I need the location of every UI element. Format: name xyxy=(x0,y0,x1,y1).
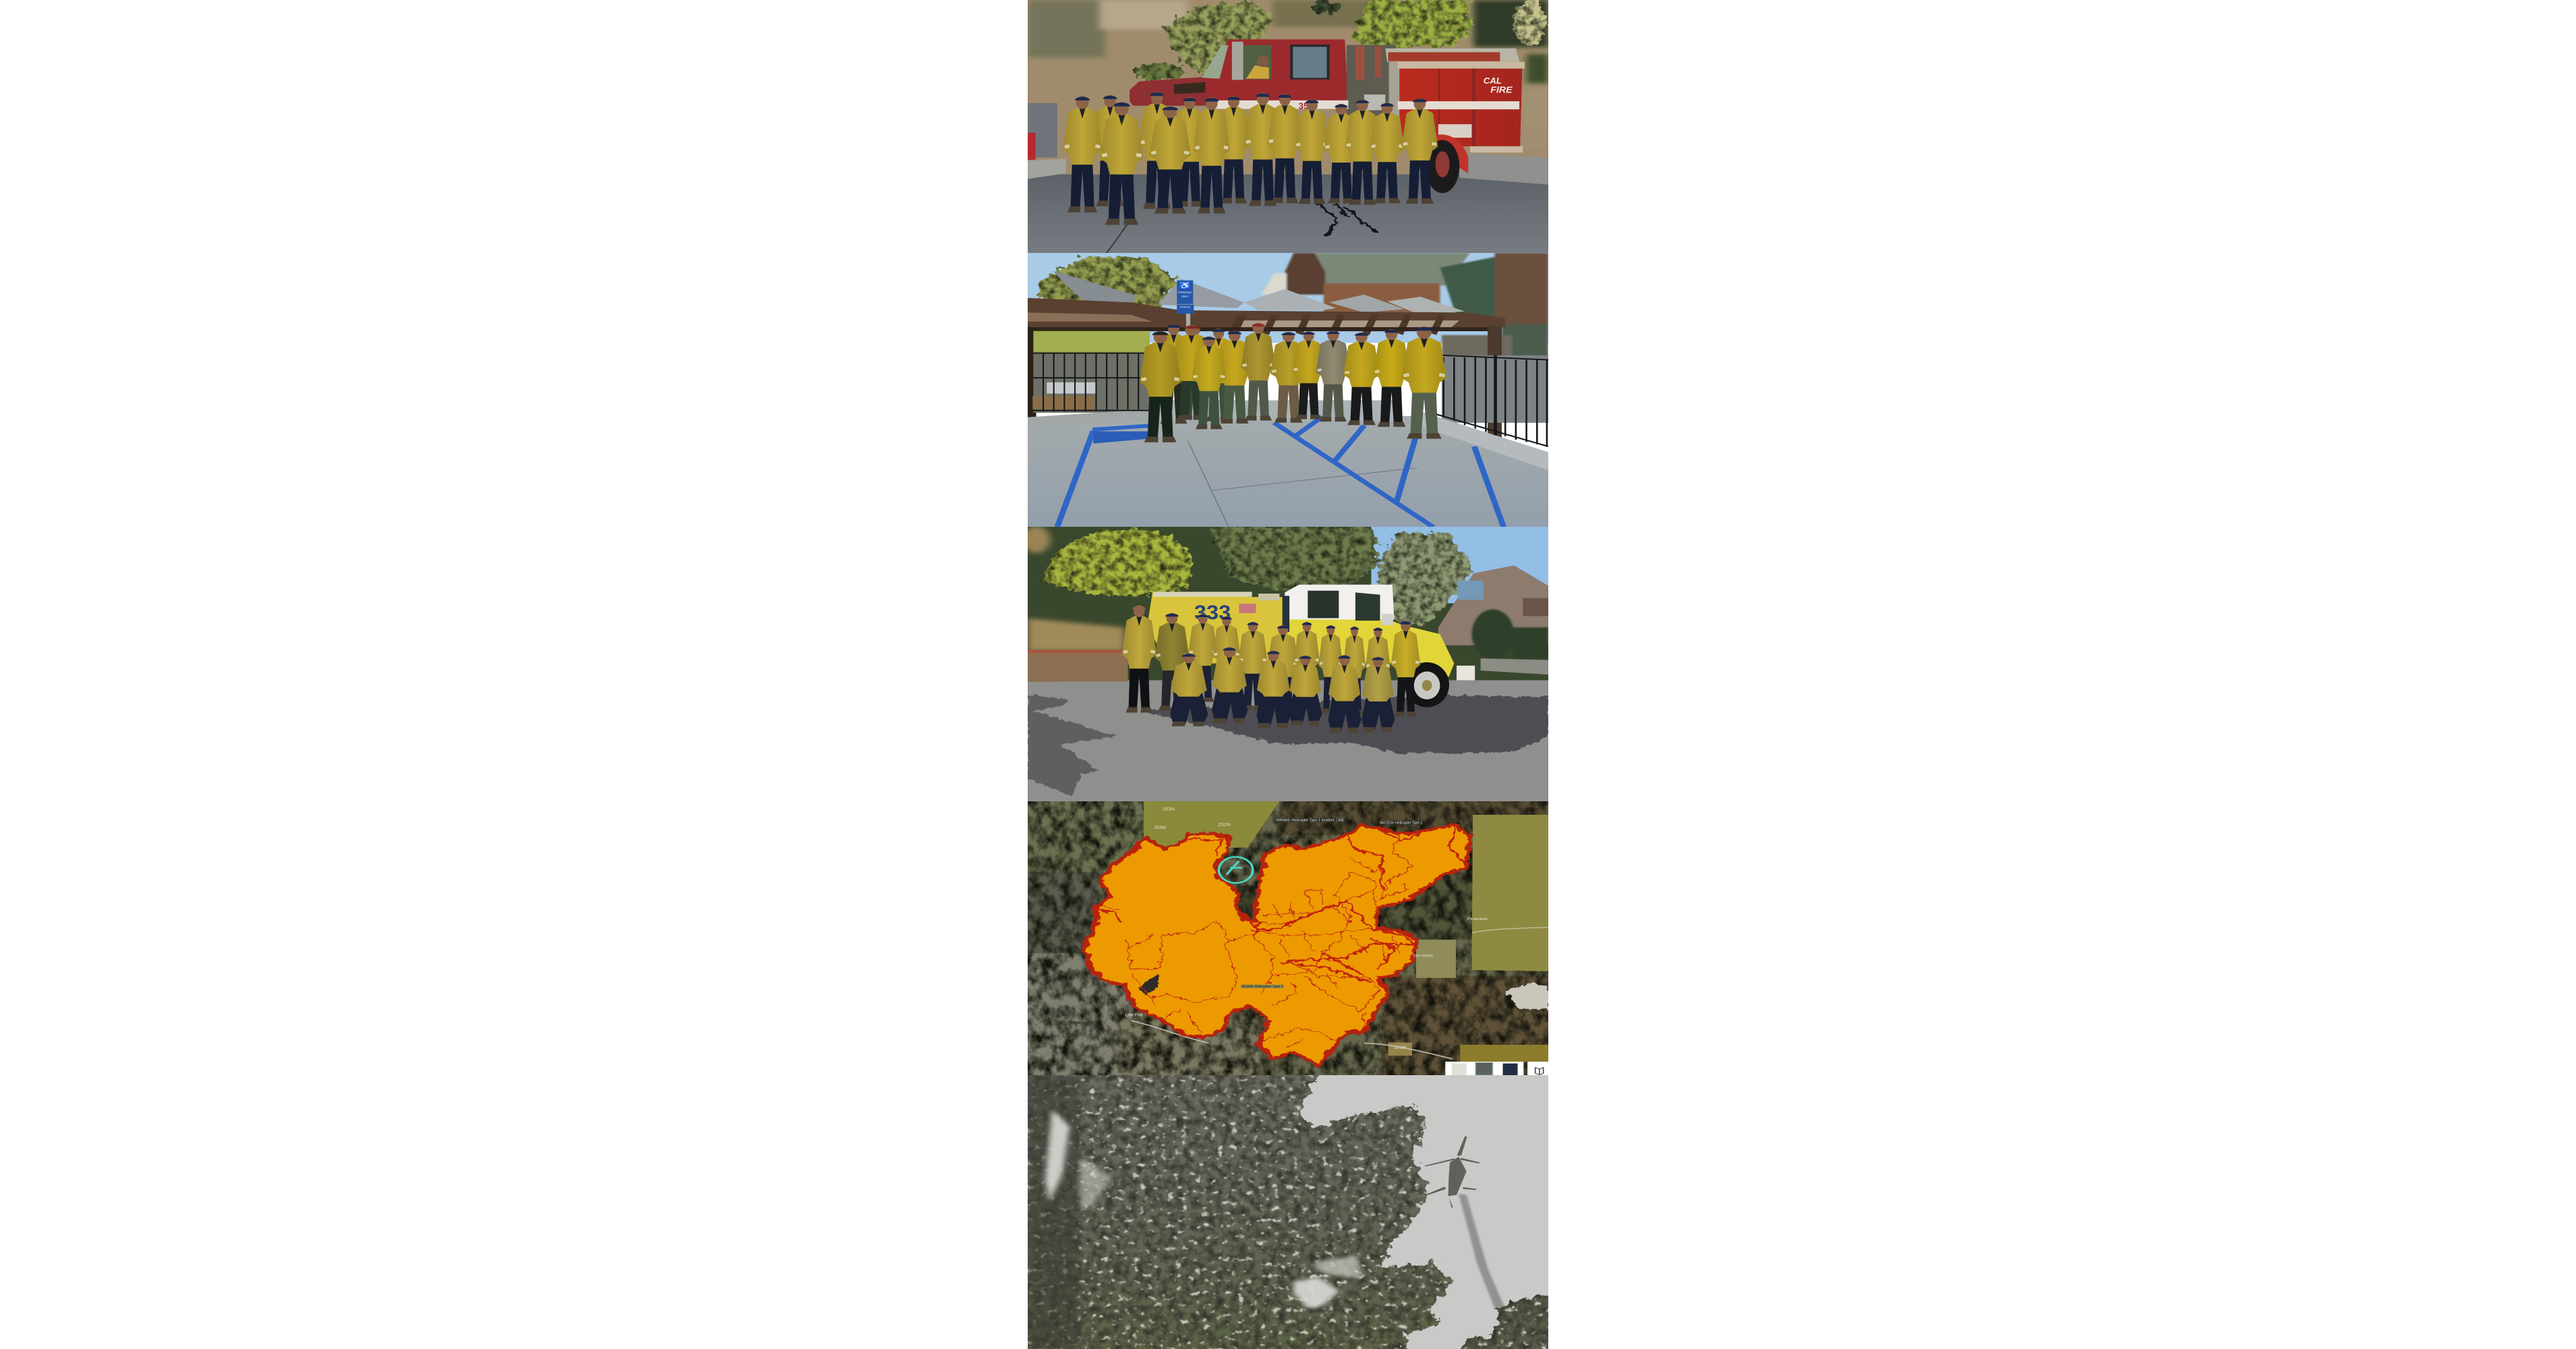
map labels: Pinaranto xyxy=(1467,916,1488,921)
yard behind fence xyxy=(1032,331,1548,423)
iron fence xyxy=(1033,353,1548,447)
panel: crew in front of yellow engine 333 xyxy=(1028,527,1548,801)
map labels: 2S2N xyxy=(1218,822,1231,827)
accessible parking sign xyxy=(1177,281,1194,339)
hazy sky xyxy=(1028,1075,1548,1349)
lower right tree xyxy=(1449,1288,1562,1349)
cyan hand-drawn circle marker xyxy=(1219,857,1253,883)
trees, sky and house background xyxy=(1022,526,1548,685)
road and wall xyxy=(1028,650,1548,801)
crew standing and kneeling xyxy=(1122,605,1420,733)
fire perimeter xyxy=(1084,825,1470,1066)
hillside and trees background xyxy=(1028,0,1550,180)
map labels: N472CH: Helicopter Type 1 xyxy=(1380,822,1423,825)
panel: satellite fire perimeter map xyxy=(1028,801,1548,1075)
map labels xyxy=(1071,807,1488,1050)
engine number: 333 xyxy=(1194,602,1231,624)
map labels: N494AS: Helicopter Type 1 Incident: LINE xyxy=(1276,819,1345,822)
road stain xyxy=(1318,204,1376,235)
fire engine xyxy=(1130,39,1525,193)
internal burn progression lines xyxy=(1103,834,1413,1047)
blue parking lines xyxy=(1057,417,1504,527)
map labels: Line Fire xyxy=(1125,1012,1143,1017)
road and curbs xyxy=(1028,103,1548,253)
map labels: Highland xyxy=(1071,1020,1088,1025)
water drop stream xyxy=(1459,1194,1505,1309)
yellow engine xyxy=(1147,585,1475,708)
basemap switcher buttons xyxy=(1445,1062,1548,1075)
helicopter xyxy=(1424,1137,1480,1208)
accessible parking sign: ONLY xyxy=(1181,295,1189,299)
map labels: N1664: Helicopter Type 1 xyxy=(1241,985,1283,989)
sky gaps through branches xyxy=(1045,1110,1361,1309)
map labels: 2S3N xyxy=(1163,807,1175,811)
accessible parking sign: WARNING xyxy=(1179,306,1190,309)
panel: helicopter water drop behind trees xyxy=(1028,1075,1548,1349)
accessible parking sign: ♿ xyxy=(1179,282,1192,289)
fire engine: FIRE xyxy=(1490,85,1513,94)
panel: hand crew in parking lot xyxy=(1028,253,1548,527)
accessible parking sign: PARKING xyxy=(1178,291,1192,295)
crew group xyxy=(1140,323,1446,442)
sky, trees and buildings xyxy=(1028,253,1548,362)
map labels: 2S3W xyxy=(1154,826,1166,830)
crew group xyxy=(1063,92,1438,225)
map labels: 2S1W xyxy=(1394,1045,1407,1050)
main tree canopy xyxy=(1018,1070,1453,1349)
map labels: Glen Martin xyxy=(1413,953,1433,958)
solar panels and pergola xyxy=(1028,271,1505,438)
fire engine: 35 xyxy=(1299,101,1309,111)
satellite terrain xyxy=(1028,801,1548,1075)
engine lettering: CAL xyxy=(1484,76,1502,86)
map overlays xyxy=(1132,801,1548,1062)
panel: CAL FIRE crew in front of red engine xyxy=(1028,0,1548,253)
parking lot and curbs xyxy=(1028,401,1548,527)
